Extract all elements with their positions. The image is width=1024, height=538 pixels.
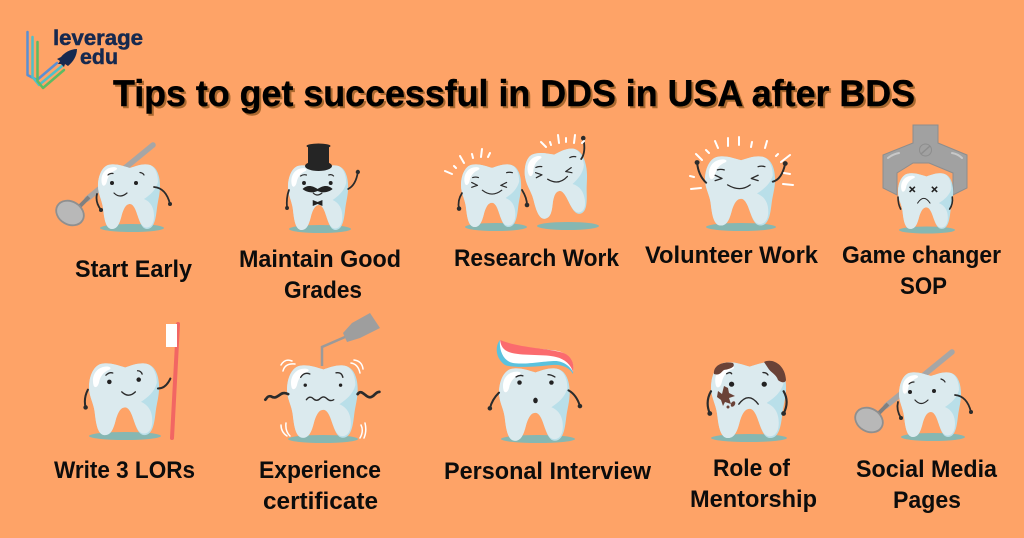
icon: tooth with toothpaste: [488, 340, 582, 443]
label: game changer sop: Game changer: [842, 242, 1001, 269]
label: experience certificate: Experience: [259, 457, 381, 484]
label: personal interview: Personal Interview: [444, 458, 651, 485]
sparkles: [690, 137, 793, 189]
icon: volunteer happy tooth: [690, 137, 793, 231]
sparkles: [445, 135, 584, 174]
vibration marks: [281, 360, 366, 438]
label: role of mentorship: Role of: [713, 455, 791, 482]
icon: tooth with top hat: [285, 144, 360, 233]
logo mark: [28, 32, 77, 88]
logo text: leverage: [53, 27, 143, 50]
decay spots: [714, 361, 786, 408]
icon: tooth with dental mirror (social media): [851, 352, 973, 441]
top hat: [305, 144, 332, 171]
label: social media pages: Social Media: [856, 456, 998, 483]
toothbrush: [172, 324, 178, 438]
icon: tooth in dental clamp: [883, 125, 967, 234]
label: role of mentorship: Mentorship: [690, 486, 817, 513]
logo: edu: [80, 46, 118, 69]
toothpaste stripes: [497, 340, 573, 374]
label: maintain good grades: Grades: [284, 277, 362, 304]
title: Tips to get successful in DDS in USA after BDS: [115, 75, 917, 116]
label: research work: Research Work: [454, 245, 620, 272]
title: Tips to get successful in DDS in USA after BDS: [113, 73, 915, 114]
icon: two happy teeth: [445, 135, 599, 231]
logo: [28, 27, 143, 88]
clamp: [883, 125, 967, 195]
label: write 3 lors: Write 3 LORs: [54, 457, 195, 484]
label: start early: Start Early: [75, 256, 193, 283]
label: game changer sop: SOP: [900, 273, 947, 300]
label: social media pages: Pages: [893, 487, 961, 514]
drill: [322, 337, 345, 366]
icon: decayed sad tooth: [707, 361, 787, 442]
label: maintain good grades: Maintain Good: [239, 246, 401, 273]
icon: nervous tooth with drill: [265, 313, 380, 443]
icon: tooth with toothbrush: [83, 324, 178, 440]
label: volunteer work: Volunteer Work: [645, 242, 819, 269]
icon: tooth with dental mirror: [52, 145, 172, 232]
label: experience certificate: certificate: [263, 488, 378, 515]
